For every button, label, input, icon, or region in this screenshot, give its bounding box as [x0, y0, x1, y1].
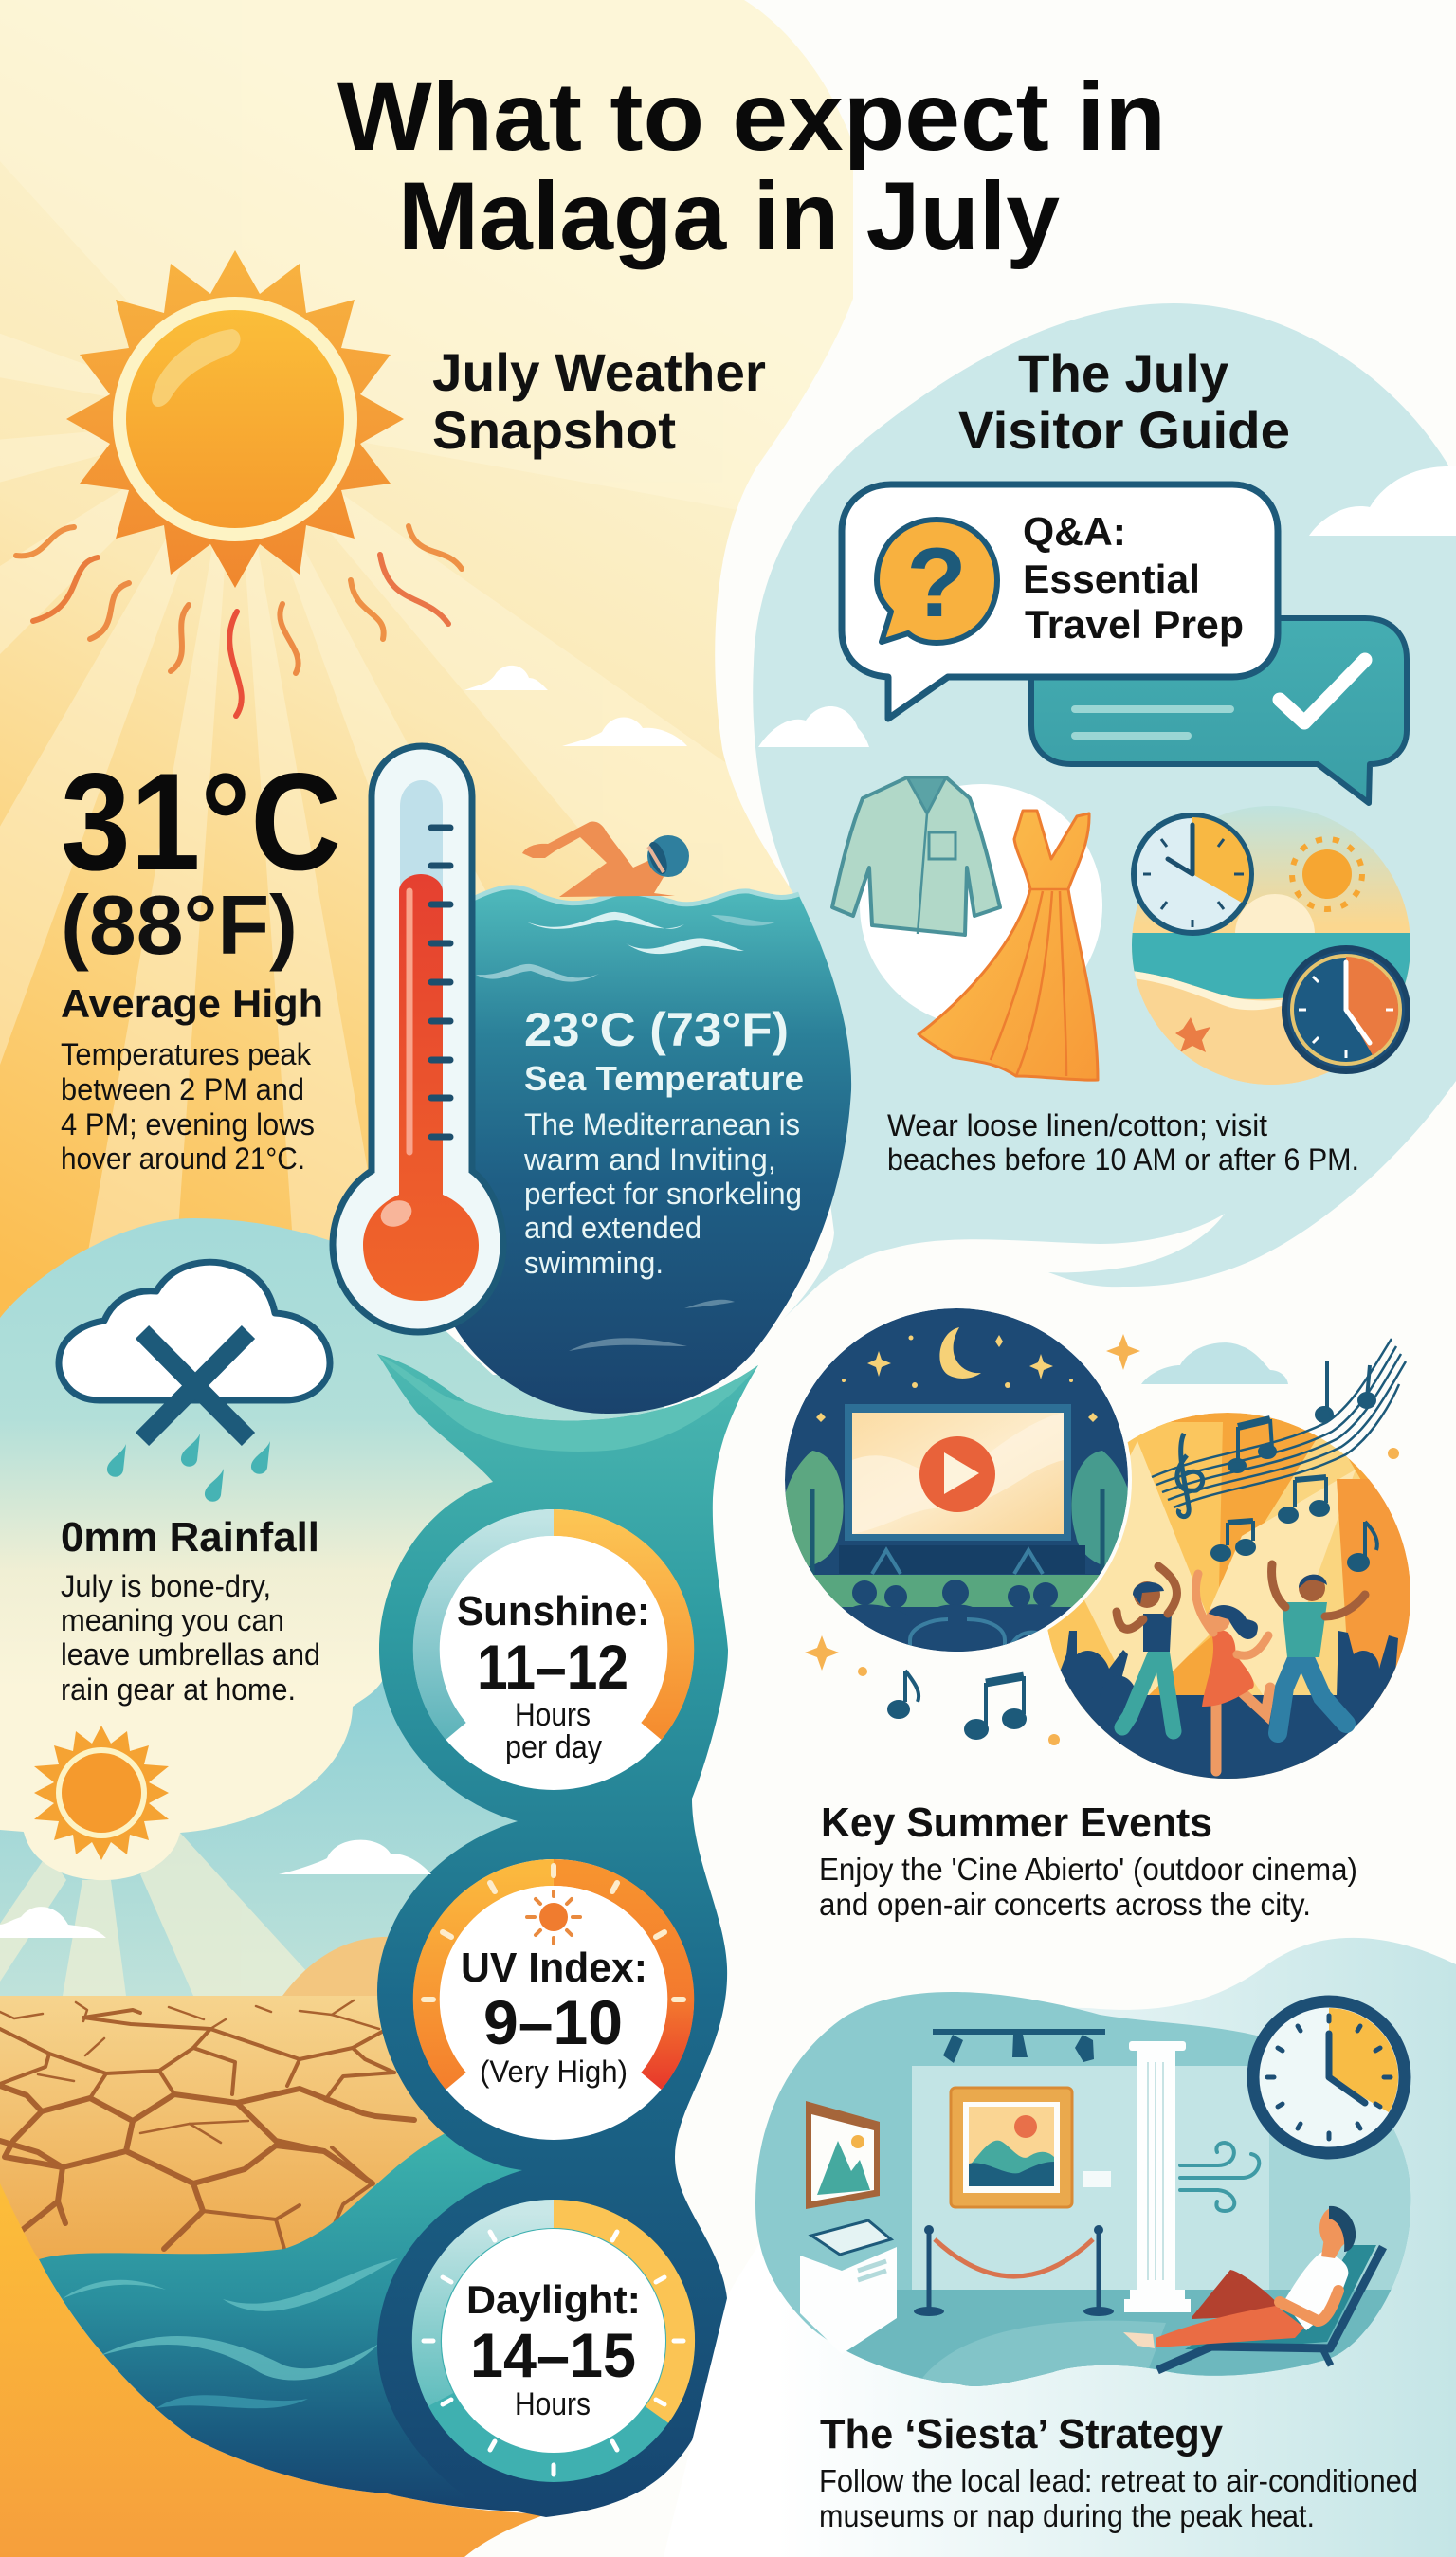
sea wave strokes — [476, 912, 777, 1351]
icon: UV sun — [527, 1891, 580, 1944]
icon: play button — [919, 1436, 995, 1512]
text block: sea temperature: The Mediterranean is — [524, 1107, 800, 1142]
music notes — [889, 1361, 1377, 1738]
column — [1124, 2041, 1191, 2312]
icon: small clouds — [464, 466, 1456, 747]
white question bubble — [842, 484, 1278, 719]
audience — [846, 1580, 1066, 1652]
icon: shirt — [832, 777, 1000, 935]
panel: daylight dial — [412, 2200, 695, 2482]
heading: Q&A Essential Travel Prep — [1023, 509, 1244, 647]
panel: sunny background — [0, 0, 853, 1318]
text block: rainfall: July is bone-dry, — [61, 1569, 271, 1603]
text block: siesta strategy: The ‘Siesta’ Strategy — [820, 2411, 1224, 2457]
dial ticks — [424, 2232, 683, 2475]
panel: siesta pale background — [664, 1938, 1456, 2557]
text block: sea temperature: and extended — [524, 1211, 701, 1245]
panel: lower sky — [0, 1659, 607, 2000]
icon: large sun — [66, 250, 404, 588]
icon: cool air — [1180, 2143, 1259, 2211]
dancer: left — [1117, 1566, 1176, 1731]
heading: July Weather Snapshot: July Weather — [432, 342, 766, 402]
teal answer bubble — [1031, 618, 1407, 803]
icon: thermometer — [333, 746, 503, 1332]
text block: sea temperature: swimming. — [524, 1246, 664, 1280]
dancer: right — [1272, 1564, 1365, 1733]
text block: key summer events: Enjoy the 'Cine Abierto' (outdoor cinema) — [819, 1852, 1357, 1887]
panel: sunshine dial — [413, 1509, 694, 1790]
text block: key summer events: and open-air concerts across the city. — [819, 1887, 1311, 1922]
illustration: siesta museum room — [749, 1982, 1422, 2399]
left painting — [806, 2101, 880, 2209]
panel: visitor guide pale blob — [753, 303, 1456, 1327]
icon: beach with clocks — [1132, 806, 1410, 1090]
icon: trees — [779, 1451, 1136, 1579]
treble clef mark — [1177, 1434, 1203, 1517]
title: What to expect in — [337, 63, 1166, 171]
heat waves — [16, 526, 462, 716]
panel: UV index dial: UV Index: — [461, 1945, 647, 1991]
panel: sea temperature — [408, 887, 851, 1414]
wave highlights — [62, 2258, 398, 2408]
text block: rainfall: leave umbrellas and — [61, 1637, 320, 1671]
panel: daylight dial: Hours — [515, 2386, 591, 2422]
thermometer ticks — [431, 828, 450, 1137]
icon: rain cloud crossed out — [59, 1262, 330, 1502]
icon: evening clock — [1284, 948, 1408, 1071]
icon: siesta clock — [1253, 2001, 1405, 2153]
text block: rainfall — [61, 1514, 320, 1707]
heading: Q&A Essential Travel Prep: Travel Prep — [1025, 602, 1244, 647]
panel: orange corner — [0, 2183, 546, 2557]
icon: music staff with notes — [889, 1339, 1406, 1738]
heading: July Weather Snapshot — [432, 342, 766, 460]
movie screen — [839, 1404, 1085, 1574]
panel: concert circle — [1043, 1413, 1422, 1790]
panel: UV index dial: 9–10 — [483, 1987, 623, 2057]
text block: average high — [61, 744, 341, 1176]
text block: what to wear — [887, 1108, 1359, 1177]
heading: The July Visitor Guide: Visitor Guide — [958, 400, 1290, 460]
panel: sunshine dial: 11–12 — [477, 1632, 628, 1702]
panel: daylight dial: Daylight: — [466, 2277, 641, 2322]
panel: lower sea waves — [39, 2124, 692, 2512]
icon: morning clock — [1134, 815, 1251, 933]
seats — [908, 1617, 1039, 1646]
text block: rainfall: rain gear at home. — [61, 1672, 296, 1707]
text block: average high: Temperatures peak — [61, 1037, 312, 1071]
title: Malaga in July — [398, 162, 1060, 270]
sand cracks — [0, 2000, 414, 2249]
text block: siesta strategy: museums or nap during the peak heat. — [819, 2498, 1315, 2533]
panel: Q&A speech bubbles — [842, 484, 1407, 803]
track lights — [933, 2029, 1105, 2063]
panel: rainfall background — [0, 1218, 664, 1880]
concert crowd — [1050, 1631, 1398, 1697]
text block: what to wear: Wear loose linen/cotton; visit — [887, 1108, 1267, 1142]
text block: sea temperature: warm and Inviting, — [523, 1142, 776, 1177]
panel: UV index dial — [413, 1859, 694, 2140]
ribbon highlight — [377, 1354, 758, 1452]
icon: dress — [919, 811, 1098, 1080]
text block: siesta strategy: Follow the local lead: retreat to air-conditioned — [819, 2463, 1418, 2498]
panel: daylight dial: 14–15 — [470, 2320, 636, 2390]
title — [337, 63, 1166, 270]
text block: rainfall: meaning you can — [61, 1603, 284, 1637]
heading: Q&A Essential Travel Prep: Q&A: — [1023, 509, 1126, 554]
panel: sunshine dial: Sunshine: — [457, 1588, 650, 1635]
panel: sunshine dial: per day — [505, 1729, 602, 1765]
icon: moon and stars — [816, 1327, 1098, 1422]
gallery wall — [912, 2066, 1269, 2290]
text block: sea temperature: perfect for snorkeling — [524, 1177, 802, 1211]
text block: key summer events: Key Summer Events — [821, 1799, 1212, 1846]
text block: rainfall: 0mm Rainfall — [61, 1514, 319, 1561]
text block: siesta strategy — [819, 2411, 1418, 2533]
panel: outdoor cinema circle — [785, 1308, 1132, 1652]
icon: question mark bubble — [877, 520, 997, 643]
display pedestal — [800, 2220, 897, 2354]
text block: sea temperature: Sea Temperature — [524, 1059, 804, 1098]
panel: sunshine dial: Hours — [515, 1697, 591, 1733]
text block: sea temperature: 23°C (73°F) — [524, 1003, 789, 1056]
panel: cracked sand — [0, 1937, 607, 2280]
icon: lower clouds — [0, 1840, 431, 1938]
heading: The July Visitor Guide: The July — [1018, 343, 1228, 403]
text block: average high: between 2 PM and — [61, 1072, 304, 1106]
text block: average high: 4 PM; evening lows — [61, 1107, 315, 1142]
panel: stats chain — [377, 1354, 758, 2517]
sun rays — [0, 171, 793, 1248]
icon: small sun — [14, 1706, 189, 1880]
rain drops — [107, 1434, 270, 1502]
panel: UV index dial: (Very High) — [480, 2055, 628, 2089]
text block: sea temperature — [523, 1003, 804, 1280]
rope barrier — [914, 2225, 1114, 2316]
dial ticks — [424, 1866, 683, 2000]
text block: average high: 31°C — [61, 744, 341, 899]
heading: Q&A Essential Travel Prep: Essential — [1023, 557, 1200, 601]
centre painting — [951, 2088, 1072, 2207]
icon: linen shirt and sundress — [832, 777, 1102, 1080]
dancer: middle — [1195, 1574, 1270, 1771]
reclining person — [1123, 2206, 1383, 2370]
text block: average high: Average High — [61, 981, 323, 1026]
heading: July Weather Snapshot: Snapshot — [432, 400, 676, 460]
text block: key summer events — [819, 1799, 1357, 1922]
text block: average high: (88°F) — [61, 878, 298, 972]
events decorations — [805, 1334, 1399, 1745]
text block: what to wear: beaches before 10 AM or after 6 PM. — [887, 1142, 1359, 1177]
icon: swimmer — [522, 822, 689, 897]
heading: The July Visitor Guide — [958, 343, 1290, 460]
text block: average high: hover around 21°C. — [61, 1142, 305, 1176]
sky rays — [0, 1833, 329, 1996]
icon: question mark bubble: ? — [906, 528, 967, 638]
